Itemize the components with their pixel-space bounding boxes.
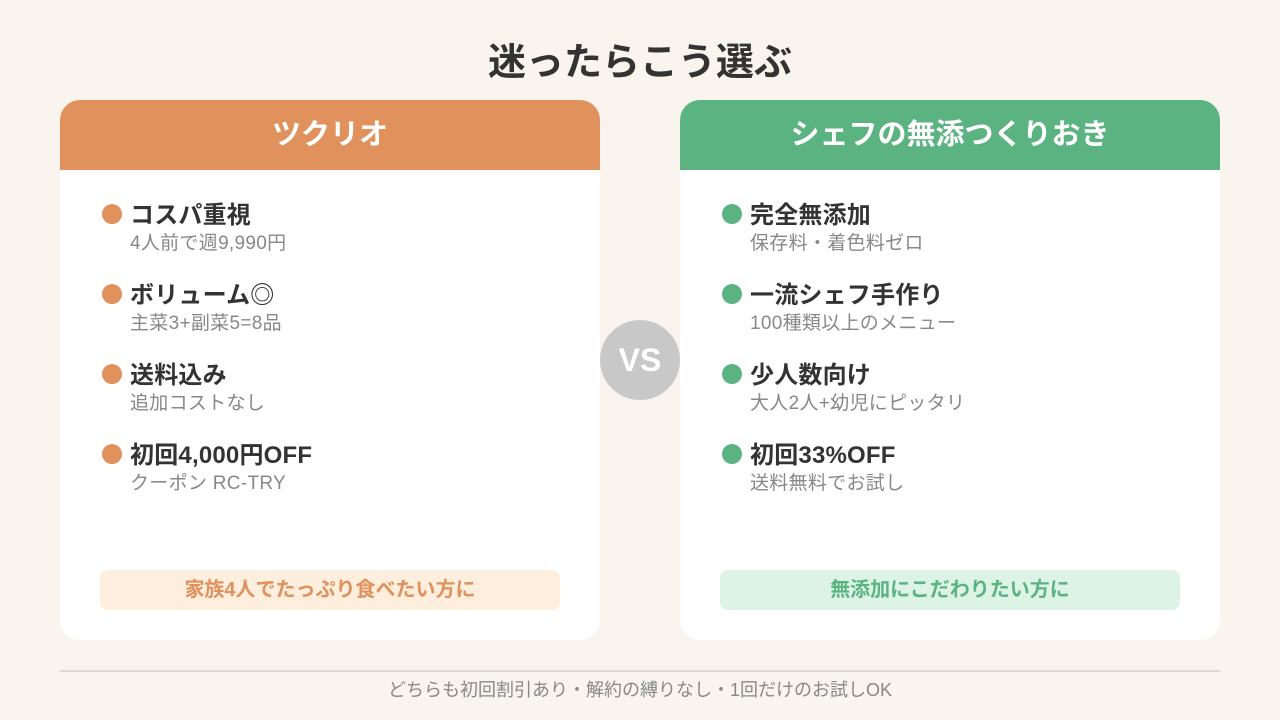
panel: chef: 大人2人+幼児にピッタリ — [750, 393, 965, 414]
panel: chef: 少人数向け — [750, 362, 871, 389]
panel: tsukurio: 初回4,000円OFF — [130, 442, 312, 469]
panel: chef: 初回33%OFF — [750, 442, 896, 469]
panel: tsukurio: 追加コストなし — [130, 393, 265, 414]
panel: chef: 送料無料でお試し — [750, 473, 904, 494]
panel: tsukurio: 4人前で週9,990円 — [130, 233, 286, 254]
vs badge — [600, 320, 680, 400]
panel: tsukurio: コスパ重視 — [130, 202, 251, 229]
header: chef: シェフの無添つくりおき — [790, 119, 1110, 151]
tag: recommendation: 家族4人でたっぷり食べたい方に — [184, 579, 476, 601]
panel: tsukurio: ボリューム◎ — [130, 282, 274, 309]
item: cost — [102, 202, 286, 254]
tag: recommendation — [100, 570, 560, 610]
panel: tsukurio: 送料込み — [130, 362, 227, 389]
tag: recommendation — [720, 570, 1180, 610]
item: volume — [102, 282, 282, 334]
item: shipping — [102, 362, 265, 414]
panel: tsukurio — [60, 100, 600, 640]
header: chef — [680, 100, 1220, 170]
title: 迷ったらこう選ぶ — [488, 31, 792, 86]
vs badge: VS — [619, 342, 661, 378]
panel: tsukurio: クーポン RC-TRY — [130, 473, 286, 494]
header: tsukurio — [60, 100, 600, 170]
header: tsukurio: ツクリオ — [272, 119, 388, 151]
item: additive free — [722, 202, 924, 254]
item: discount — [102, 442, 312, 494]
item: discount — [722, 442, 904, 494]
panel: chef: 保存料・着色料ゼロ — [750, 233, 924, 254]
item: chef made — [722, 282, 956, 334]
item: small family — [722, 362, 965, 414]
panel: chef: 完全無添加 — [750, 202, 871, 229]
panel: chef — [680, 100, 1220, 640]
panel: chef: 100種類以上のメニュー — [750, 313, 956, 334]
panel: tsukurio: 主菜3+副菜5=8品 — [130, 313, 282, 334]
footer note: どちらも初回割引あり・解約の縛りなし・1回だけのお試しOK — [388, 680, 892, 700]
tag: recommendation: 無添加にこだわりたい方に — [830, 579, 1070, 601]
panel: chef: 一流シェフ手作り — [750, 282, 944, 309]
